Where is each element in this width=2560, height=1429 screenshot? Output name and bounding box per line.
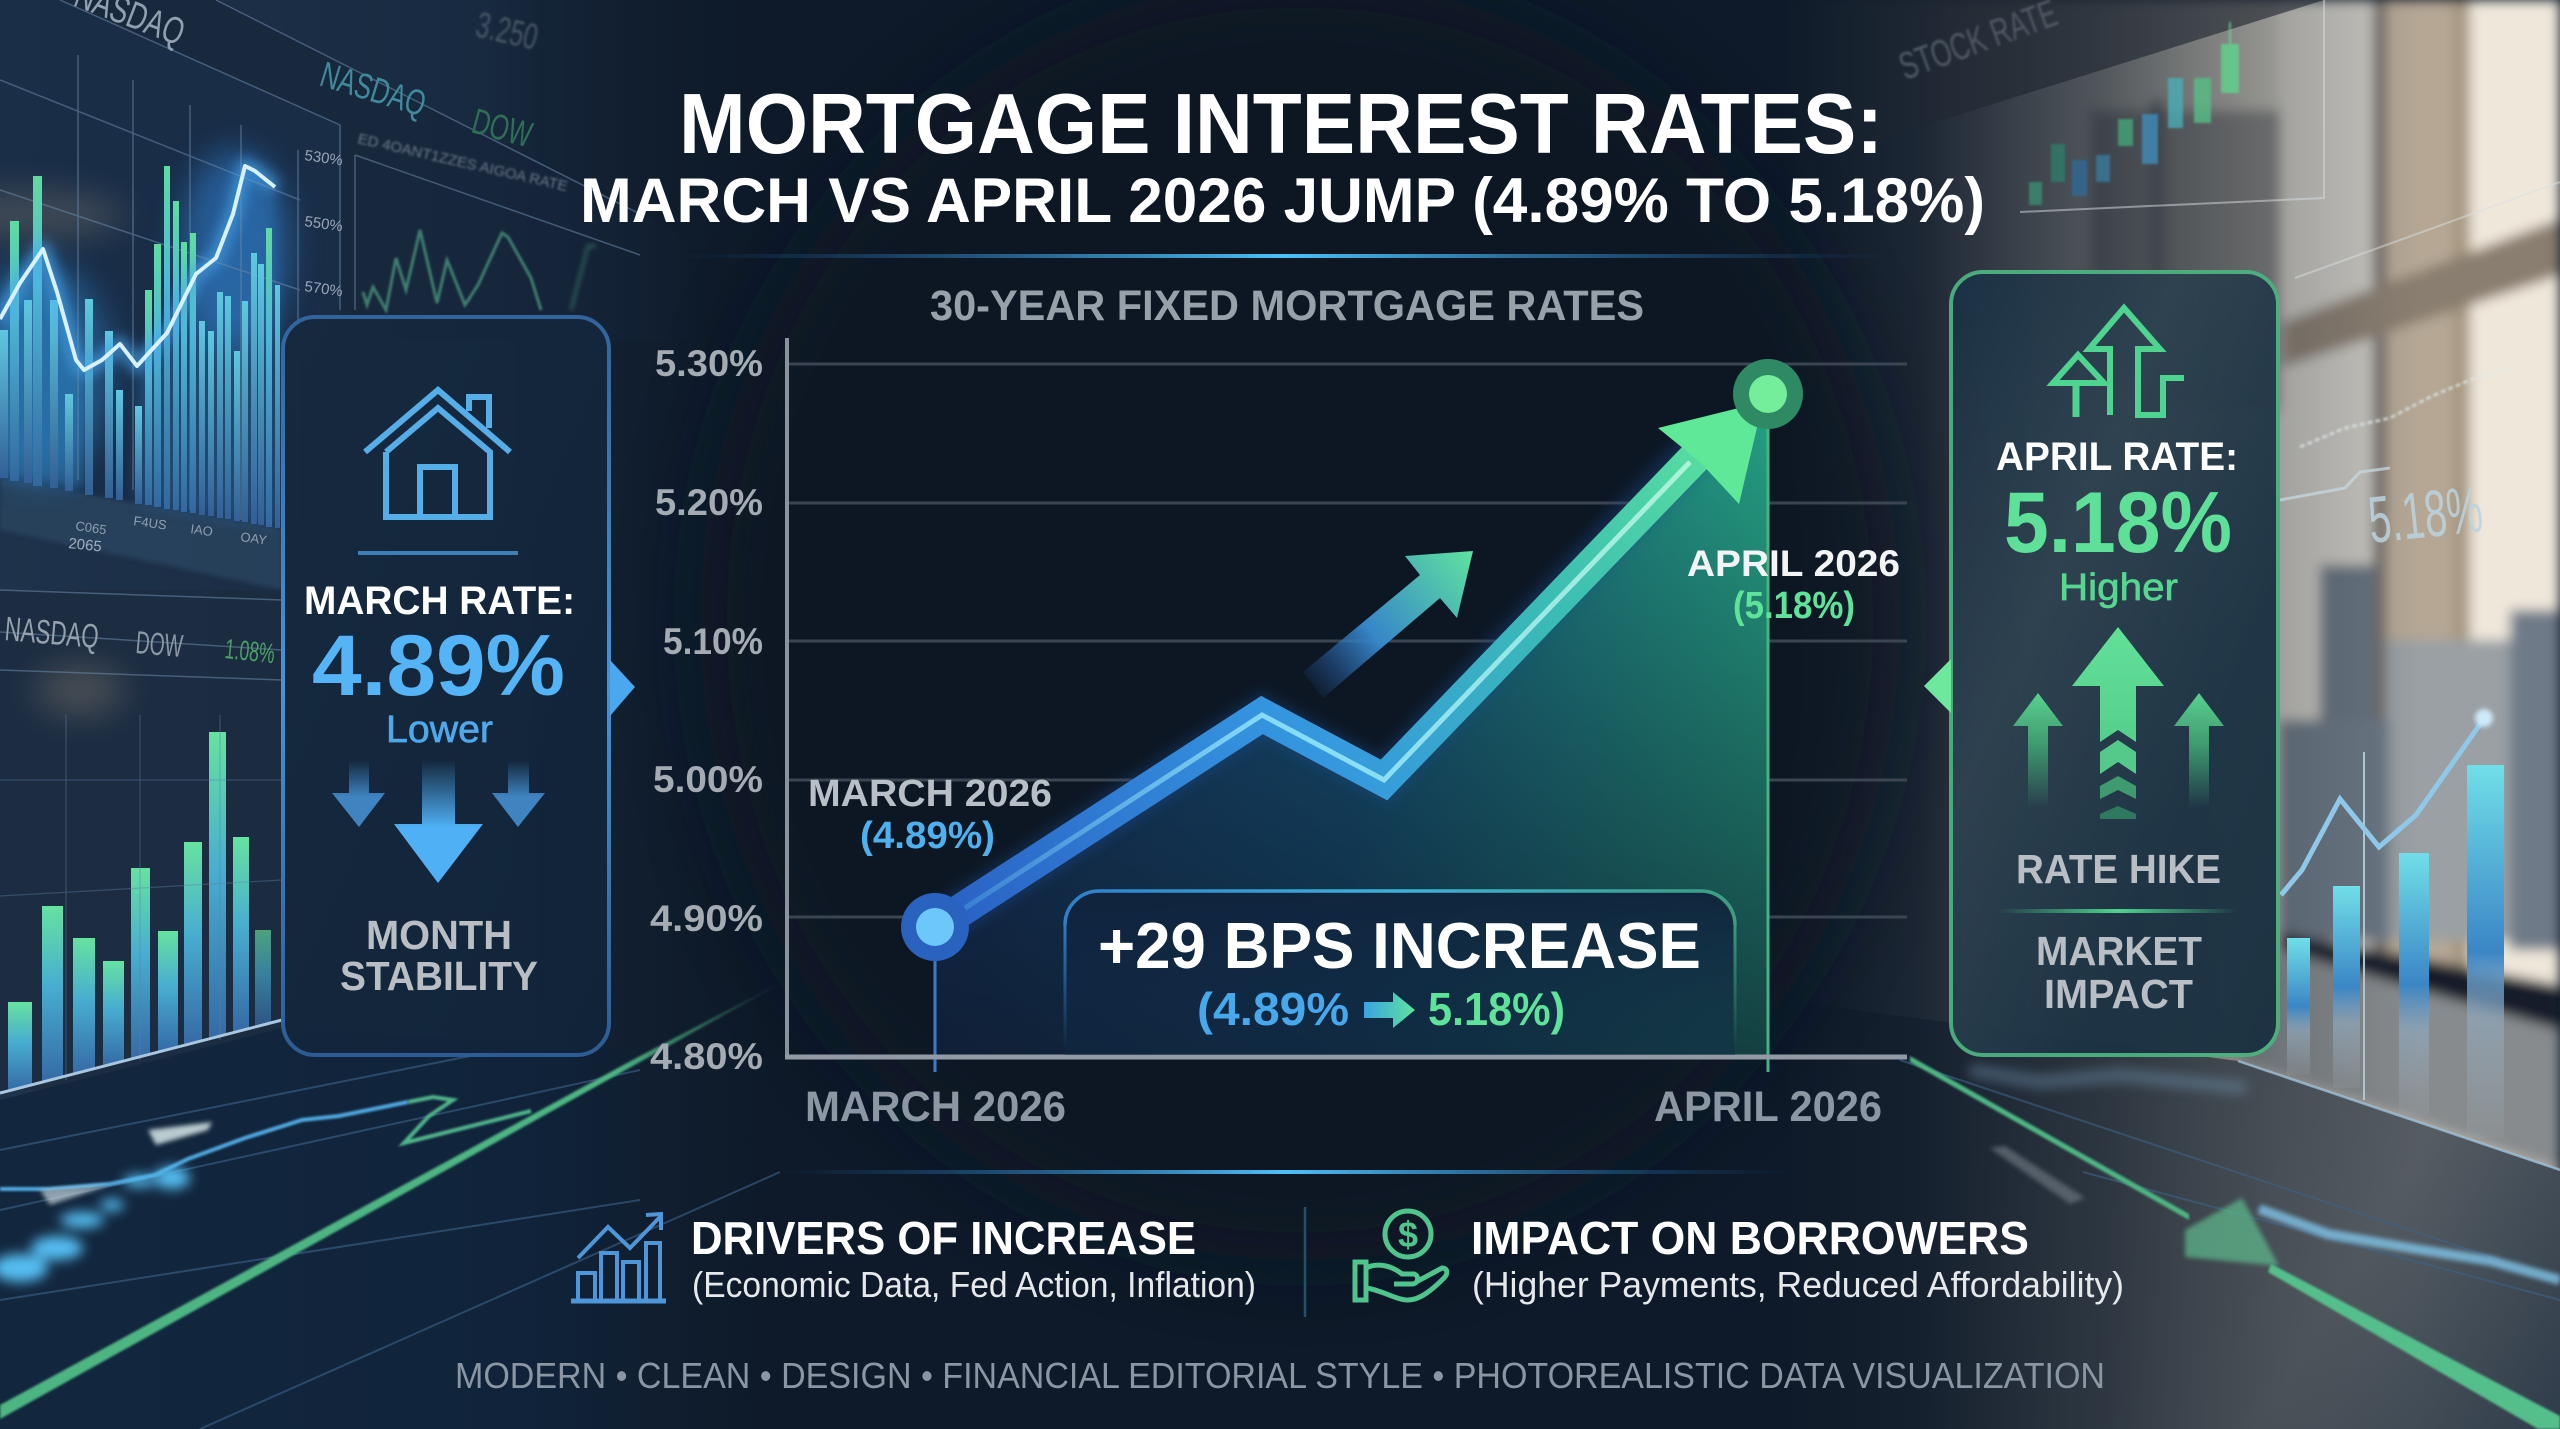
pointer: left xyxy=(1924,659,1951,713)
icon: house xyxy=(365,390,510,517)
bar chart: upper left screen xyxy=(0,166,280,528)
bar chart: lower left screen: BIRD xyxy=(182,1045,218,1069)
y-axis labels xyxy=(650,343,763,1077)
screen labels: tickers on left screen: NASDAQ xyxy=(316,53,431,124)
x-axis labels xyxy=(805,1083,1882,1131)
label: april 2026 xyxy=(1687,543,1900,627)
panel: march rate xyxy=(283,317,635,1055)
chart subtitle: 30-YEAR FIXED MORTGAGE RATES xyxy=(930,282,1644,330)
end marker: april xyxy=(1733,359,1803,429)
screen labels: tickers on left screen: 2065 xyxy=(68,535,103,555)
screen labels: tickers on left screen: 530% xyxy=(303,147,344,169)
lower label: Lower xyxy=(386,709,493,751)
rate line: march to april xyxy=(935,445,1705,927)
month stability text: STABILITY xyxy=(340,953,538,999)
screen labels: tickers on left screen: ED 4OANT1ZZES AIGOA RATE xyxy=(356,130,569,195)
screen labels: tickers on left screen: OAY xyxy=(240,529,268,548)
bar chart: lower left screen: IOOG xyxy=(127,1061,166,1085)
background: floor with light streaks xyxy=(0,978,2560,1429)
y-axis labels: 5.30% xyxy=(655,343,763,384)
title xyxy=(580,77,1985,236)
divider xyxy=(1998,909,2238,913)
y-axis labels: 5.00% xyxy=(653,759,763,800)
y-axis labels: 4.90% xyxy=(650,898,763,939)
background: candlestick chart and overlays on window xyxy=(1894,0,2560,1138)
screen labels: tickers on left screen: F4US xyxy=(133,513,168,533)
month stability text xyxy=(340,912,538,999)
icon: hand with dollar coin xyxy=(1355,1211,1447,1300)
march rate value: 4.89% xyxy=(312,618,565,714)
line chart: 30-year fixed mortgage rates xyxy=(650,338,1907,1131)
screen labels: tickers on left screen: IAO xyxy=(190,521,214,539)
line chart: glowing line on left screen xyxy=(0,166,275,370)
description: (Economic Data, Fed Action, Inflation) xyxy=(692,1264,1256,1305)
label: march 2026 xyxy=(808,773,1052,857)
screen labels: tickers on left screen: DOW xyxy=(134,624,185,664)
y-axis labels: 5.10% xyxy=(663,621,763,662)
screen labels: tickers on left screen: C065 xyxy=(75,518,107,537)
description: (Higher Payments, Reduced Affordability) xyxy=(1472,1264,2124,1305)
market impact text xyxy=(2036,928,2202,1017)
callout: +29 bps increase: +29 BPS INCREASE xyxy=(1098,909,1701,982)
section: impact on borrowers xyxy=(1355,1211,2124,1305)
y-axis labels: 5.20% xyxy=(655,482,763,523)
screen labels: tickers on left screen: 570% xyxy=(303,278,344,300)
market impact text: IMPACT xyxy=(2044,971,2193,1017)
label: april 2026: APRIL 2026 xyxy=(1687,543,1900,584)
icon: up arrows with chevrons xyxy=(2013,627,2224,819)
icon: chart with up arrow xyxy=(571,1214,666,1301)
march rate label: MARCH RATE: xyxy=(304,579,575,623)
april rate label: APRIL RATE: xyxy=(1996,435,2238,479)
month stability text: MONTH xyxy=(366,912,512,958)
heading: IMPACT ON BORROWERS xyxy=(1471,1212,2029,1264)
chart: faint green line on far screen xyxy=(363,230,541,310)
icon: double up arrows xyxy=(2053,308,2184,417)
divider xyxy=(358,551,518,555)
april rate value: 5.18% xyxy=(2004,475,2232,571)
callout: +29 bps increase: 5.18%) xyxy=(1428,983,1565,1035)
screen labels: tickers on left screen: 1.08% xyxy=(223,633,276,669)
panel: april rate xyxy=(1924,272,2278,1055)
shaded area under line xyxy=(935,394,1768,1057)
vertical divider xyxy=(1304,1207,1306,1317)
x-axis labels: APRIL 2026 xyxy=(1654,1083,1882,1131)
label: march 2026: (4.89%) xyxy=(860,815,995,857)
title: MARCH VS APRIL 2026 JUMP (4.89% TO 5.18%) xyxy=(580,166,1985,236)
heading: DRIVERS OF INCREASE xyxy=(691,1212,1196,1264)
background: left main screen xyxy=(0,0,700,1119)
drop lines and axis baseline xyxy=(785,394,1907,1072)
rate hike text: RATE HIKE xyxy=(2016,846,2221,892)
market impact text: MARKET xyxy=(2036,928,2202,974)
y-axis labels: 4.80% xyxy=(650,1036,763,1077)
screen labels: tickers on left screen: DOW xyxy=(468,100,537,155)
label: march 2026: MARCH 2026 xyxy=(808,773,1052,815)
bar chart: lower left screen: SOIS xyxy=(6,1095,42,1119)
arrowhead xyxy=(1658,402,1763,504)
bottom divider xyxy=(780,1170,1790,1174)
icon: down arrows xyxy=(332,760,545,883)
higher label: Higher xyxy=(2059,567,2178,609)
callout: +29 bps increase: (4.89% xyxy=(1197,983,1349,1035)
icon: hand with dollar coin: $ xyxy=(1398,1214,1418,1255)
bar chart: lower left screen: DOW xyxy=(68,1077,106,1101)
bar chart: lower left screen xyxy=(0,715,282,1119)
background: candlestick chart and overlays on window: 5.18% xyxy=(2365,471,2486,557)
screen labels: tickers on left screen: NASDAQ xyxy=(3,610,100,656)
callout: +29 bps increase xyxy=(1065,891,1735,1055)
x-axis labels: MARCH 2026 xyxy=(805,1083,1066,1131)
screen labels: tickers on left screen xyxy=(3,0,569,669)
label: april 2026: (5.18%) xyxy=(1733,585,1855,627)
start marker: march xyxy=(901,893,969,961)
screen labels: tickers on left screen: 550% xyxy=(303,213,344,235)
section: drivers of increase xyxy=(571,1212,1256,1305)
footer text: MODERN • CLEAN • DESIGN • FINANCIAL EDITORIAL STYLE • PHOTOREALISTIC DATA VISUALIZATION xyxy=(455,1355,2105,1396)
title: MORTGAGE INTEREST RATES: xyxy=(679,77,1883,172)
background: bright window scene xyxy=(1780,0,2560,1429)
secondary up arrow xyxy=(1303,551,1473,698)
title divider xyxy=(680,254,1890,258)
chart grid lines and axes xyxy=(787,338,1907,1058)
pointer: right xyxy=(610,660,635,716)
screen labels: tickers on left screen: 3.250 xyxy=(472,4,542,58)
